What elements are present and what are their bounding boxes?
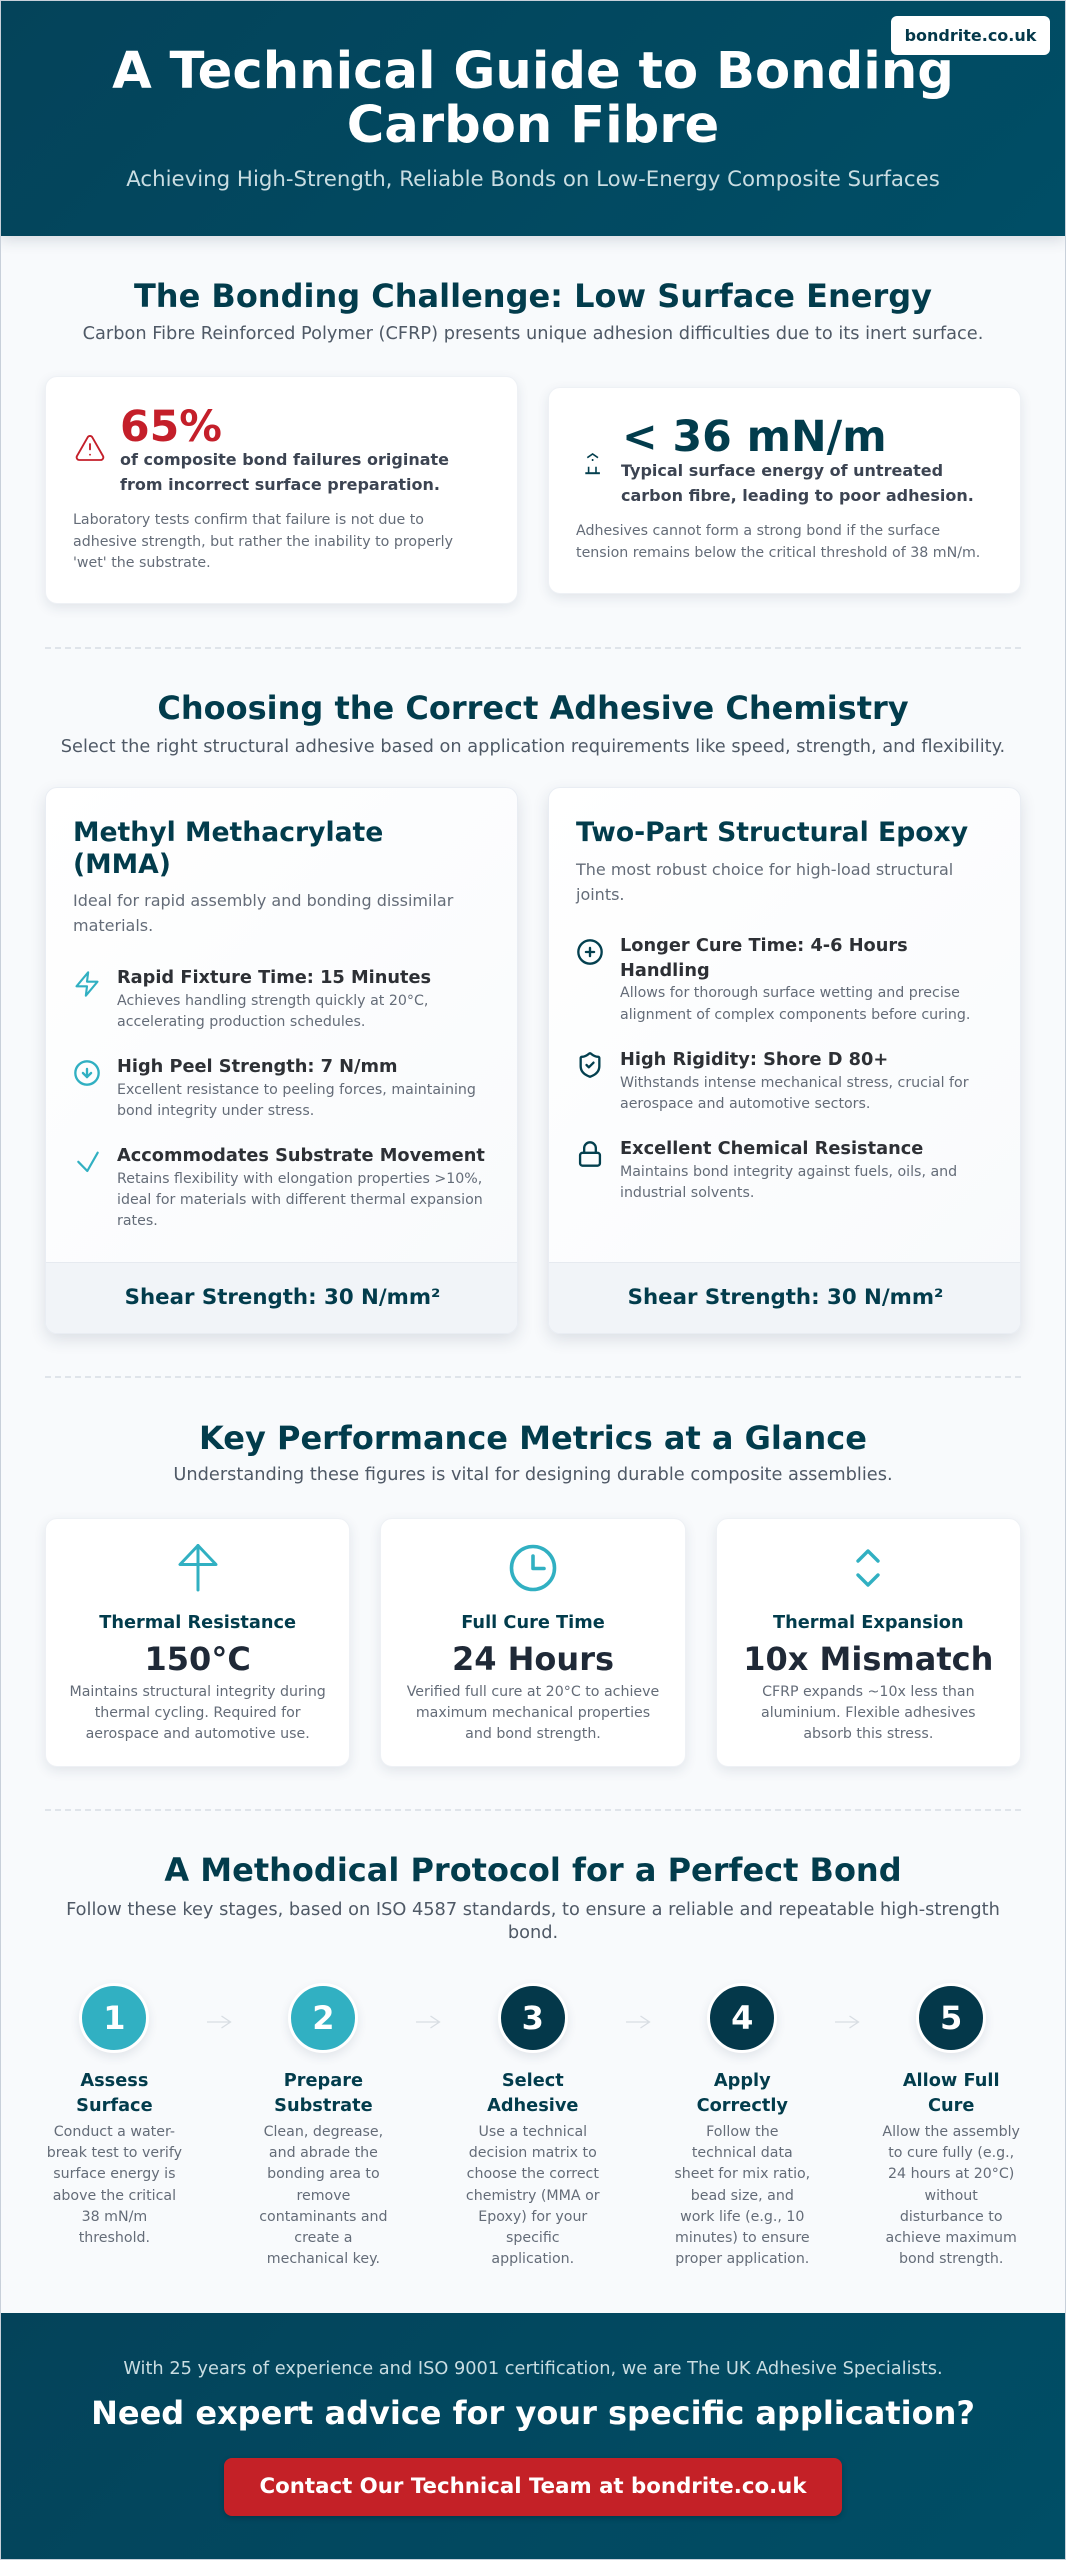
feature text: aerospace and automotive sectors. <box>620 1096 870 1112</box>
step text: sheet for mix ratio, <box>674 2166 810 2182</box>
step text: above the critical <box>53 2188 176 2204</box>
icon: shield check <box>580 1052 600 1078</box>
panel: epoxy adhesive <box>548 787 1021 1334</box>
panel intro <box>576 860 953 904</box>
step title <box>662 2069 822 2119</box>
panel footer: shear strength <box>549 1262 1022 1335</box>
brand badge: bondrite.co.uk <box>905 26 1036 45</box>
feature text: Retains flexibility with elongation properties >10%, <box>117 1170 482 1186</box>
step number: 5 <box>940 1999 962 2037</box>
feature text <box>117 992 428 1030</box>
step text: remove <box>296 2188 350 2204</box>
metric value: 10x Mismatch <box>743 1640 993 1678</box>
header banner <box>0 0 1066 236</box>
step 3 <box>453 1982 613 2282</box>
feature: rigidity <box>580 1050 969 1112</box>
step title <box>76 2071 153 2116</box>
stat detail: Adhesives cannot form a strong bond if the surface <box>576 523 940 539</box>
metric description: maximum mechanical properties <box>416 1705 650 1721</box>
icon: circle plus <box>577 939 603 965</box>
arrow 4 to 5 <box>835 2015 860 2029</box>
feature title: Accommodates Substrate Movement <box>117 1146 485 1166</box>
step text: and abrade the <box>269 2145 378 2161</box>
step text: create a <box>294 2230 353 2246</box>
step title: Cure <box>928 2096 974 2116</box>
stat detail: tension remains below the critical threshold of 38 mN/m. <box>576 545 980 561</box>
metric description: CFRP expands ~10x less than <box>762 1684 975 1700</box>
feature title: Excellent Chemical Resistance <box>620 1139 923 1159</box>
call to action heading: Need expert advice for your specific application? <box>91 2394 975 2432</box>
stat caption <box>621 461 974 505</box>
step text: achieve maximum <box>886 2230 1017 2246</box>
feature: substrate movement <box>77 1146 485 1229</box>
feature text <box>117 1082 476 1119</box>
contact button <box>224 2458 842 2516</box>
step 2 <box>243 1982 403 2282</box>
feature title: Rapid Fixture Time: 15 Minutes <box>117 968 431 988</box>
icon: clock <box>510 1544 556 1592</box>
step text: mechanical key. <box>267 2251 380 2267</box>
feature text <box>117 1170 483 1229</box>
feature text: ideal for materials with different thermal expansion <box>117 1192 483 1208</box>
icon: surface energy <box>585 453 600 474</box>
panel intro <box>73 891 454 935</box>
brand badge <box>891 16 1050 55</box>
step text: contaminants and <box>259 2209 388 2225</box>
subtitle: Achieving High-Strength, Reliable Bonds on Low-Energy Composite Surfaces <box>126 167 940 192</box>
step number <box>707 1983 777 2053</box>
feature title: Longer Cure Time: 4-6 Hours <box>620 936 908 956</box>
step text: to cure fully (e.g., <box>888 2145 1014 2161</box>
step 1 <box>47 1986 182 2246</box>
feature title <box>620 936 908 981</box>
step title: Substrate <box>274 2096 373 2116</box>
feature text: Achieves handling strength quickly at 20°C, <box>117 992 428 1008</box>
step title: Apply <box>714 2071 771 2091</box>
feature text: alignment of complex components before curing. <box>620 1007 970 1023</box>
metric card: thermal expansion <box>716 1518 1021 1767</box>
step text: technical data <box>692 2145 793 2161</box>
metric description: Verified full cure at 20°C to achieve <box>407 1684 659 1700</box>
panel intro: materials. <box>73 916 153 935</box>
arrow 2 to 3 <box>416 2015 441 2029</box>
feature title: High Peel Strength: 7 N/mm <box>117 1057 397 1077</box>
stat caption: of composite bond failures originate <box>120 450 449 469</box>
step number <box>916 1983 986 2053</box>
feature: cure time <box>577 936 970 1023</box>
metric card: thermal resistance <box>45 1518 350 1767</box>
icon: padlock <box>578 1141 602 1167</box>
step text: bead size, and <box>691 2188 794 2204</box>
panel heading: Two-Part Structural Epoxy <box>576 817 968 848</box>
feature: peel strength <box>74 1057 476 1119</box>
section intro: key metrics: Understanding these figures is vital for designing durable composite assemblies. <box>173 1465 893 1485</box>
panel heading: (MMA) <box>73 849 171 880</box>
metric description <box>761 1684 976 1742</box>
section intro: bonding challenge: Carbon Fibre Reinforced Polymer (CFRP) presents unique adhesion difficulties due to its inert surface. <box>83 324 983 344</box>
feature: chemical resistance <box>578 1139 957 1201</box>
step text: 24 hours at 20°C) <box>888 2166 1014 2182</box>
step text <box>47 2124 182 2246</box>
stat detail <box>576 523 980 561</box>
stat caption: Typical surface energy of untreated <box>621 461 943 480</box>
step number <box>79 1983 149 2053</box>
step title <box>243 2069 403 2119</box>
feature text: accelerating production schedules. <box>117 1014 365 1030</box>
feature text: rates. <box>117 1213 158 1229</box>
step number: 3 <box>522 1999 544 2037</box>
feature text <box>620 1164 957 1201</box>
step text: surface energy is <box>53 2166 176 2182</box>
step title: Select <box>502 2071 564 2091</box>
step text: Epoxy) for your <box>478 2209 587 2225</box>
title: A Technical Guide to Bonding <box>112 41 954 101</box>
panel heading <box>73 817 383 880</box>
section heading: bonding challenge: The Bonding Challenge: Low Surface Energy <box>134 277 932 315</box>
step text: break test to verify <box>47 2145 182 2161</box>
metric description: and bond strength. <box>465 1726 601 1742</box>
metric description: Maintains structural integrity during <box>70 1684 326 1700</box>
step text: disturbance to <box>900 2209 1003 2225</box>
step text <box>453 2122 613 2271</box>
icon: check mark <box>77 1152 99 1172</box>
stat detail: Laboratory tests confirm that failure is not due to <box>73 512 424 528</box>
metric label: Thermal Resistance <box>99 1612 296 1632</box>
section heading: key metrics: Key Performance Metrics at a Glance <box>199 1419 867 1457</box>
section intro: protocol: bond. <box>508 1923 558 1943</box>
step text: specific <box>506 2230 560 2246</box>
title <box>112 41 954 155</box>
step title: Prepare <box>284 2071 363 2091</box>
step title <box>871 2069 1031 2119</box>
step text: proper application. <box>675 2251 809 2267</box>
icon: warning triangle <box>76 435 104 461</box>
section heading: adhesive chemistry: Choosing the Correct Adhesive Chemistry <box>157 689 909 727</box>
icon: circle arrow down <box>74 1060 100 1086</box>
feature text: Maintains bond integrity against fuels, oils, and <box>620 1164 957 1180</box>
step number <box>498 1983 568 2053</box>
step title: Allow Full <box>903 2071 1000 2091</box>
panel footer: shear strength <box>46 1262 519 1335</box>
stat caption <box>120 450 449 494</box>
step title: Surface <box>76 2096 153 2116</box>
metric label: Full Cure Time <box>461 1612 605 1632</box>
title: Carbon Fibre <box>347 95 719 155</box>
step text: Follow the <box>706 2124 778 2140</box>
panel: surface energy stat card <box>548 386 1021 594</box>
panel heading: Methyl Methacrylate <box>73 817 383 848</box>
step 4 <box>662 1982 822 2282</box>
step number: 1 <box>103 1999 126 2037</box>
stat detail <box>73 512 453 571</box>
step text: minutes) to ensure <box>675 2230 810 2246</box>
panel: MMA adhesive <box>45 787 518 1334</box>
section intro: adhesive chemistry: Select the right structural adhesive based on application requirements like speed, strength, and flexibility. <box>61 737 1005 757</box>
section heading: protocol: A Methodical Protocol for a Perfect Bond <box>164 1851 902 1889</box>
footer call to action <box>0 2313 1066 2560</box>
metric description: thermal cycling. Required for <box>95 1705 301 1721</box>
step text <box>871 2122 1031 2271</box>
step text: choose the correct <box>467 2166 599 2182</box>
metric label: Thermal Expansion <box>773 1612 964 1632</box>
stat caption: carbon fibre, leading to poor adhesion. <box>621 486 974 505</box>
icon: expansion chevrons <box>856 1549 880 1587</box>
panel intro: joints. <box>576 884 625 904</box>
metric description <box>70 1684 326 1742</box>
step title: Adhesive <box>487 2096 578 2116</box>
section intro: protocol: Follow these key stages, based on ISO 4587 standards, to ensure a reliable and repeatable high-strength <box>66 1900 1000 1920</box>
credentials line: With 25 years of experience and ISO 9001 certification, we are The UK Adhesive Specialists. <box>123 2359 943 2379</box>
metric value: 150°C <box>145 1640 251 1678</box>
step title: Correctly <box>697 2096 788 2116</box>
panel intro: Ideal for rapid assembly and bonding dissimilar <box>73 891 453 910</box>
step number <box>288 1983 358 2053</box>
step text: 38 mN/m <box>82 2209 147 2225</box>
feature: fixture time <box>75 968 431 1030</box>
stat value: < 36 mN/m <box>622 412 887 462</box>
metric card: cure time <box>380 1518 686 1767</box>
feature text <box>620 985 970 1023</box>
step text: Conduct a water- <box>54 2124 175 2140</box>
icon: lightning bolt <box>75 971 99 997</box>
step text: decision matrix to <box>469 2145 597 2161</box>
step text: application. <box>491 2251 574 2267</box>
feature text: Withstands intense mechanical stress, crucial for <box>620 1075 969 1091</box>
step text: Use a technical <box>478 2124 587 2140</box>
step text <box>243 2122 403 2271</box>
step number: 2 <box>312 1999 335 2037</box>
step text: Clean, degrease, <box>264 2124 383 2140</box>
feature text: industrial solvents. <box>620 1185 754 1201</box>
stat caption: from incorrect surface preparation. <box>120 475 440 494</box>
step text: chemistry (MMA or <box>466 2188 600 2204</box>
stat detail: 'wet' the substrate. <box>73 555 211 571</box>
feature title: Handling <box>620 961 710 981</box>
step number: 4 <box>731 1999 753 2037</box>
metric description: aluminium. Flexible adhesives <box>761 1705 976 1721</box>
metric description <box>406 1684 659 1742</box>
feature text: Excellent resistance to peeling forces, maintaining <box>117 1082 476 1098</box>
step text <box>662 2122 822 2271</box>
stat value: 65% <box>120 402 222 452</box>
metric value: 24 Hours <box>452 1640 614 1678</box>
feature text <box>620 1075 969 1112</box>
metric description: aerospace and automotive use. <box>86 1726 310 1742</box>
contact button: Contact Our Technical Team at bondrite.co.uk <box>259 2474 807 2499</box>
panel footer: shear strength: Shear Strength: 30 N/mm² <box>125 1285 440 1310</box>
step text: threshold. <box>79 2230 150 2246</box>
icon: thermal arrow <box>178 1544 218 1592</box>
step text: without <box>925 2188 978 2204</box>
panel footer: shear strength: Shear Strength: 30 N/mm² <box>628 1285 943 1310</box>
feature text: Allows for thorough surface wetting and precise <box>620 985 960 1001</box>
panel intro: The most robust choice for high-load structural <box>576 860 953 878</box>
step text: work life (e.g., 10 <box>680 2209 804 2225</box>
step text: bond strength. <box>899 2251 1003 2267</box>
metric description: absorb this stress. <box>803 1726 933 1742</box>
step text: bonding area to <box>267 2166 380 2182</box>
arrow 3 to 4 <box>626 2015 651 2029</box>
step title: Assess <box>80 2071 148 2091</box>
feature title: High Rigidity: Shore D 80+ <box>620 1050 888 1070</box>
step 5 <box>871 1982 1031 2282</box>
arrow 1 to 2 <box>207 2016 232 2028</box>
step title <box>453 2069 613 2119</box>
section intro: protocol <box>66 1900 1000 1943</box>
feature text: bond integrity under stress. <box>117 1103 314 1119</box>
step text: Allow the assembly <box>882 2124 1020 2140</box>
stat detail: adhesive strength, but rather the inability to properly <box>73 534 453 550</box>
panel: 65% stat card <box>45 376 518 604</box>
